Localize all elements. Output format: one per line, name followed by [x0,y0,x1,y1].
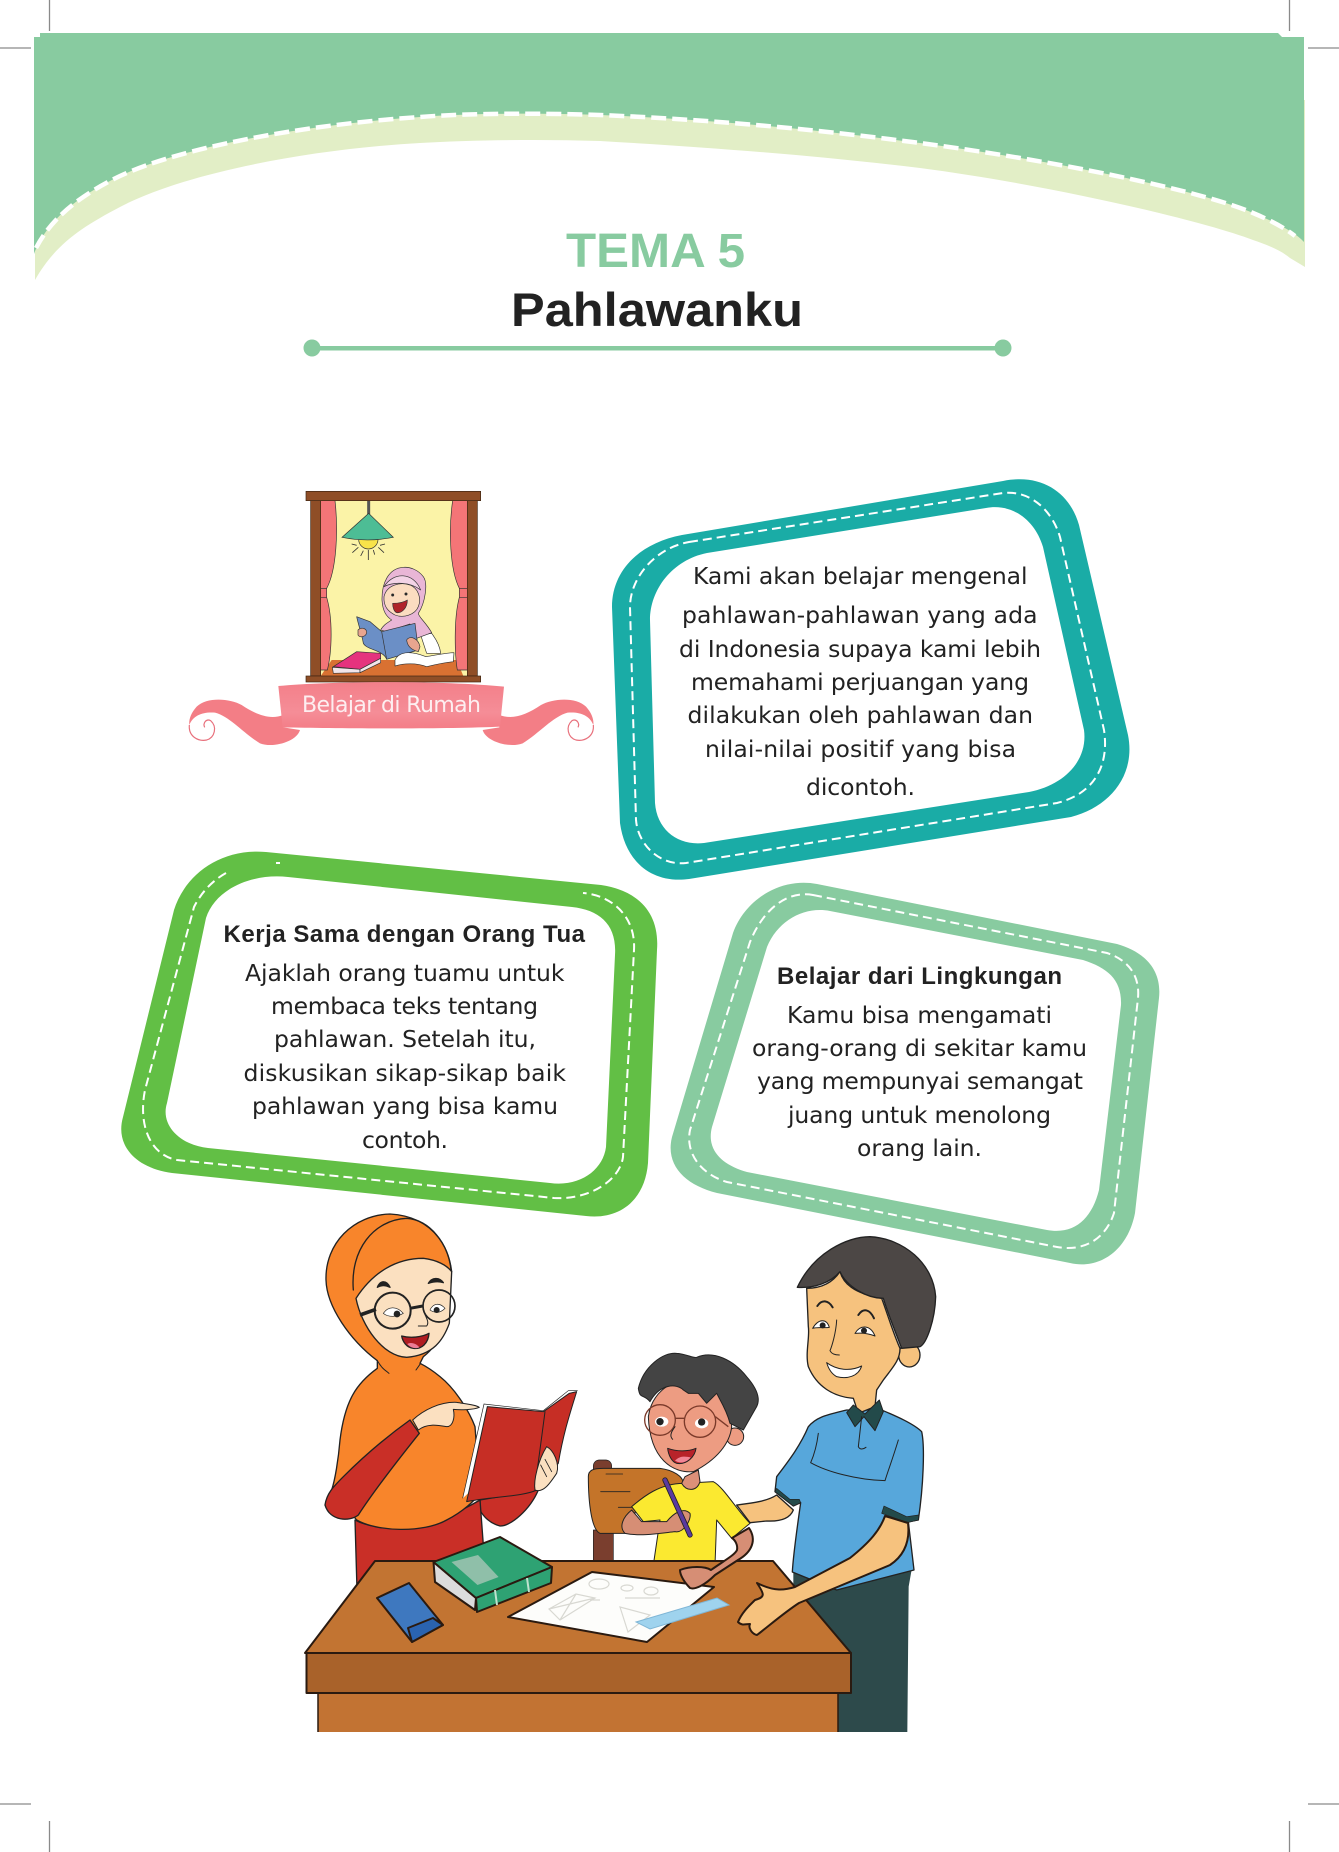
text: Belajar dari Lingkungan: yang mempunyai semangat [757,1067,1083,1095]
text: intro paragraph: di Indonesia supaya kami lebih [679,635,1041,663]
text: Kerja Sama dengan Orang Tua: pahlawan. Setelah itu, [274,1025,536,1053]
curtains [321,501,467,670]
text: intro paragraph: dicontoh. [806,773,915,801]
header banner [34,33,1305,280]
blue pencil case [377,1583,443,1642]
paper with geometry drawings [508,1572,714,1642]
ribbon: Belajar di Rumah: Belajar di Rumah [302,693,481,718]
text: Belajar dari Lingkungan: Kamu bisa mengamati [787,1001,1052,1029]
text: intro paragraph: Kami akan belajar mengenal [693,562,1028,590]
girl figure [332,567,454,673]
panel: green card [121,852,657,1217]
ribbon: Belajar di Rumah [189,682,593,745]
text: Kerja Sama dengan Orang Tua: membaca teks tentang [271,992,538,1020]
text: Kerja Sama dengan Orang Tua: Ajaklah orang tuamu untuk [245,959,565,987]
father trousers [793,1560,913,1732]
text: Kerja Sama dengan Orang Tua: contoh. [362,1126,448,1154]
illustration: family at table [305,1214,936,1732]
heading underline with end dots [304,340,1012,356]
window frame [306,491,481,682]
text: Kerja Sama dengan Orang Tua: diskusikan sikap-sikap baik [244,1059,566,1087]
text: Belajar dari Lingkungan [752,963,1087,1162]
panel: mint card [671,883,1159,1264]
illustration: girl reading at window [306,491,481,682]
text: Belajar dari Lingkungan: orang-orang di sekitar kamu [752,1034,1087,1062]
text: intro paragraph: nilai-nilai positif yang bisa [705,735,1016,763]
title: TEMA 5: TEMA 5 [566,225,745,278]
father head [797,1237,936,1449]
text: Belajar dari Lingkungan: Belajar dari Lingkungan [777,963,1062,990]
father arm and hand [738,1516,908,1635]
figures: boy, chair and father [588,1237,936,1732]
figure: mother [325,1214,578,1590]
ruler [636,1598,729,1629]
chair [588,1460,683,1563]
ribbon right tail [483,700,593,745]
boy arm and hand on paper [680,1528,753,1588]
father shirt [775,1410,923,1590]
icon: hanging lamp [342,501,393,560]
text: Kerja Sama dengan Orang Tua: Kerja Sama dengan Orang Tua [224,921,586,948]
ribbon left tail [189,700,300,745]
boy [622,1353,758,1565]
text: intro paragraph [679,562,1041,801]
text: Kerja Sama dengan Orang Tua [224,921,586,1154]
heading: Pahlawanku: Pahlawanku [511,283,803,336]
table [305,1561,851,1732]
text: intro paragraph: pahlawan-pahlawan yang ada [682,601,1038,629]
text: Belajar dari Lingkungan: orang lain. [857,1134,982,1162]
panel: teal card [612,479,1129,880]
text: intro paragraph: memahami perjuangan yang [691,668,1029,696]
text: Kerja Sama dengan Orang Tua: pahlawan yang bisa kamu [252,1092,558,1120]
text: Belajar dari Lingkungan: juang untuk menolong [787,1101,1051,1129]
text: intro paragraph: dilakukan oleh pahlawan dan [688,701,1033,729]
father far arm [737,1495,793,1523]
green book [434,1537,552,1612]
